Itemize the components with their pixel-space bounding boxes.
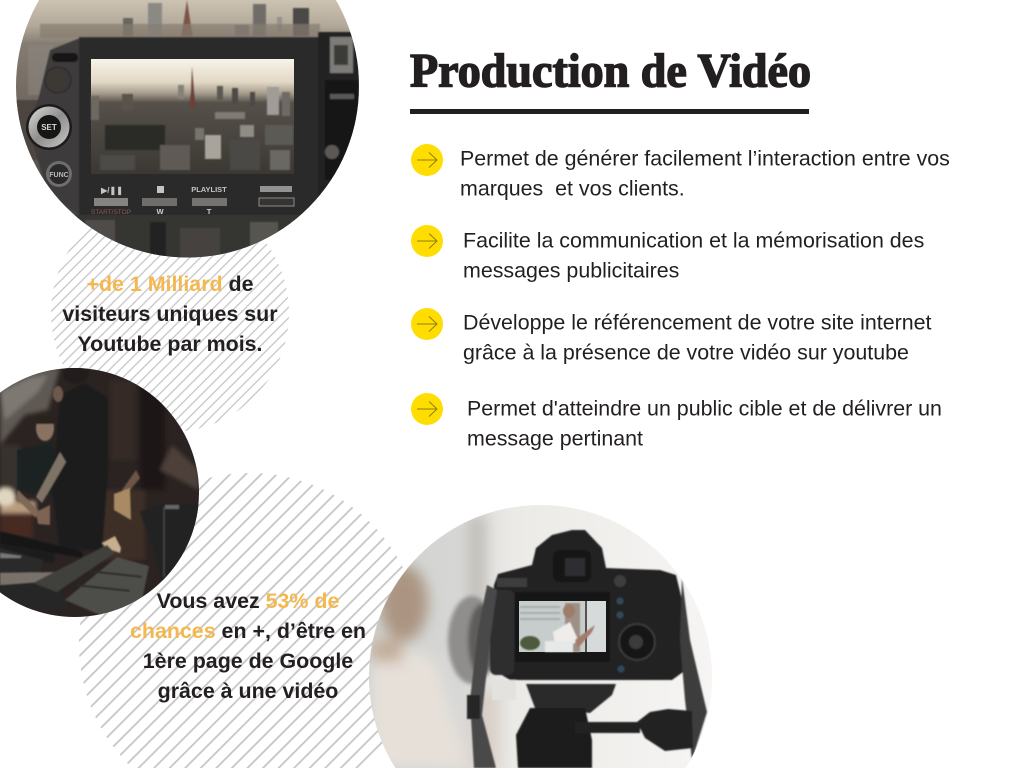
bullet text: message pertinant: [467, 426, 643, 450]
title: Production de Vidéo: [410, 44, 811, 98]
bullet 3: [411, 308, 932, 364]
camcorder FUNC button: [46, 161, 72, 187]
photo: camcorder screen over city: [16, 0, 359, 260]
camera body: [490, 530, 683, 680]
camcorder FUNC button: FUNC: [49, 172, 69, 179]
clapperboard: [0, 531, 83, 558]
camcorder body: [33, 38, 80, 214]
camcorder bottom controls: PLAYLIST: [191, 185, 227, 194]
icon: yellow arrow: [411, 225, 443, 257]
bullet 2: [411, 225, 924, 282]
bullet 4: [411, 393, 942, 450]
right side of camcorder: [317, 31, 359, 198]
icon: yellow arrow: [411, 393, 443, 425]
bullet text: Facilite la communication et la mémorisation des: [463, 228, 924, 252]
camcorder control dial: SET: [41, 123, 57, 132]
camcorder bottom controls: W: [156, 207, 164, 216]
bullet 1: [411, 144, 950, 200]
statistic: Google first page chances: chances en +, d’être en: [130, 619, 366, 643]
hatched circle: behind Youtube statistic: [51, 194, 289, 432]
lower city: [74, 214, 302, 258]
statistic: Google first page chances: Vous avez 53% de: [157, 589, 339, 613]
lens behind camera: [448, 596, 496, 684]
envelope in hand: [114, 488, 131, 520]
statistic: Youtube visitors: +de 1 Milliard de: [86, 272, 254, 296]
camcorder control dial: [26, 104, 72, 150]
photo: DSLR on tripod filming a woman: [369, 505, 712, 768]
bullet text: Développe le référencement de votre site internet: [463, 310, 932, 334]
statistic: Youtube visitors: visiteurs uniques sur: [62, 302, 278, 326]
statistic: Youtube visitors: Youtube par mois.: [77, 332, 263, 356]
camera on right: [140, 504, 198, 582]
camcorder bottom controls: ▶/❚❚: [100, 186, 123, 196]
statistic: Google first page chances: 1ère page de Google: [143, 649, 353, 673]
tripod head: [492, 680, 516, 700]
statistic: Google first page chances: grâce à une vidéo: [158, 679, 338, 703]
title underline: [410, 109, 809, 114]
icon: yellow arrow: [411, 144, 443, 176]
icon: yellow arrow: [411, 308, 443, 340]
bullet text: Permet de générer facilement l’interaction entre vos: [460, 146, 950, 170]
bullet text: grâce à la présence de votre vidéo sur youtube: [463, 340, 909, 364]
camcorder bottom controls: [91, 185, 294, 216]
bullet text: marques et vos clients.: [460, 176, 685, 200]
boot on floor: [102, 536, 121, 553]
camcorder bottom controls: T: [207, 207, 212, 216]
photo: film crew on set: [0, 362, 199, 618]
seated man: [17, 442, 60, 495]
hatched circle: behind Google statistic: [79, 473, 421, 768]
bullet text: messages publicitaires: [463, 258, 679, 282]
camcorder bottom controls: START/STOP: [91, 209, 131, 216]
standing man: [52, 383, 108, 550]
camcorder LCD screen: [91, 59, 294, 174]
straps: [470, 585, 497, 768]
camera LCD showing the subject: [519, 601, 606, 652]
bullet text: Permet d'atteindre un public cible et de délivrer un: [467, 396, 942, 420]
